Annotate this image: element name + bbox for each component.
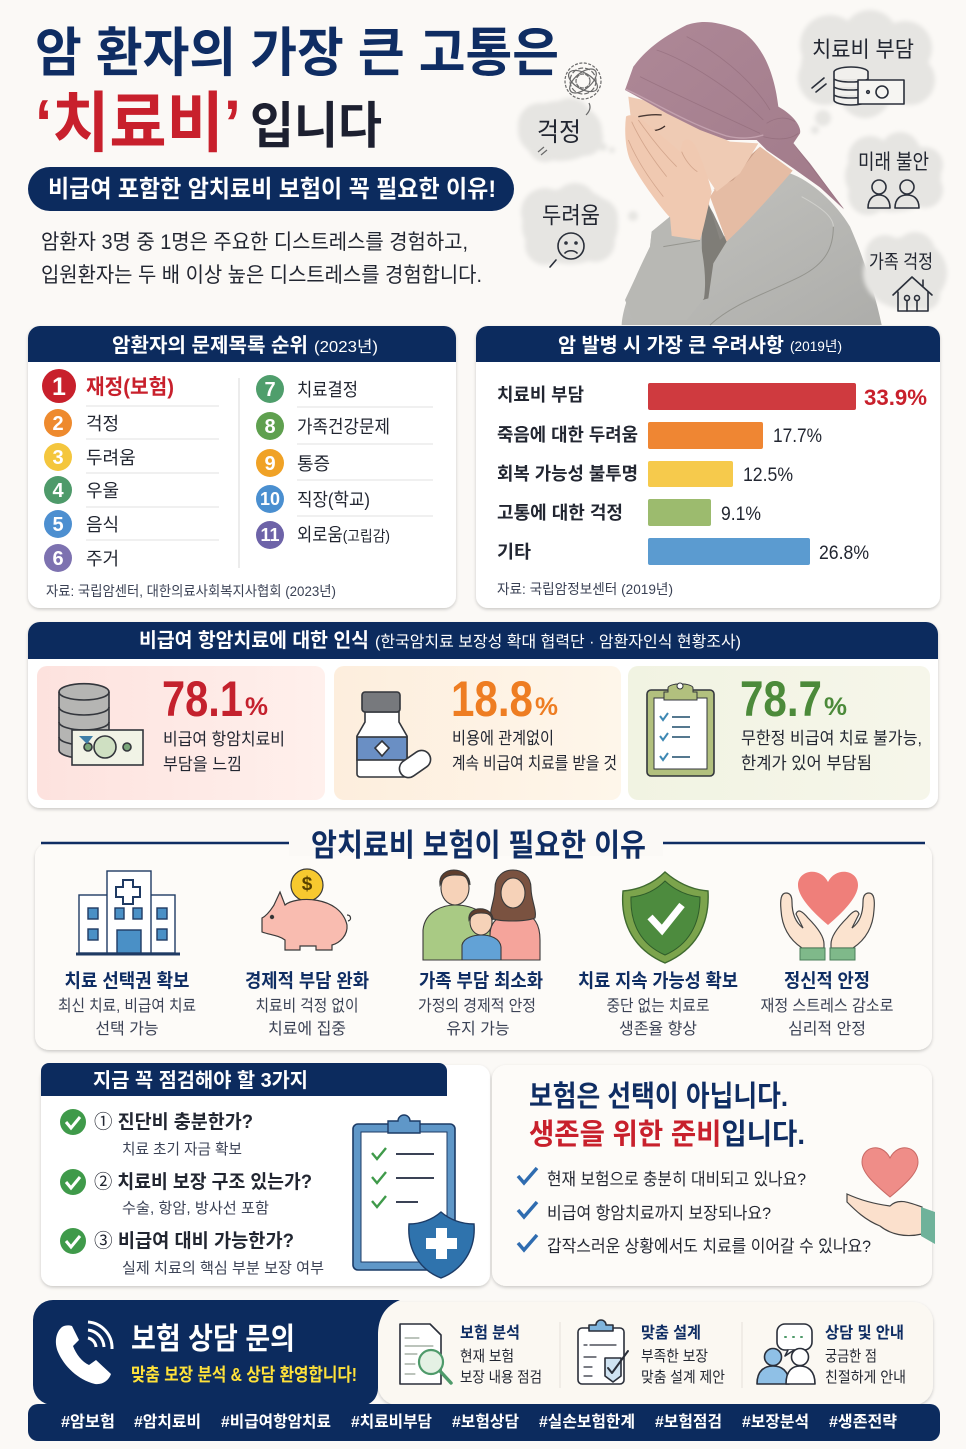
bar: recovery uncertainty — [497, 461, 793, 487]
reason: financial relief: 치료에 집중 — [268, 1020, 346, 1038]
heading: 생존을 위한 준비입니다. — [529, 1118, 805, 1151]
rank list right — [256, 375, 390, 549]
panel: biggest concerns bar chart — [476, 326, 940, 608]
rank list left — [42, 369, 174, 572]
reason: financial relief — [245, 869, 369, 1038]
intro text: 암환자 3명 중 1명은 주요한 디스트레스를 경험하고, — [41, 231, 468, 254]
reason: mental stability — [760, 872, 894, 1038]
reason: family burden: 유지 가능 — [446, 1020, 510, 1038]
icon: checklist clipboard — [647, 683, 714, 776]
bar: fear of death: 죽음에 대한 두려움 — [497, 425, 638, 445]
panel header: awareness: 비급여 항암치료에 대한 인식 — [139, 629, 369, 652]
illustration: woman covering face — [622, 22, 882, 325]
icon: coins and bill — [59, 684, 143, 765]
stat card: 78.1%: 부담을 느낌 — [163, 755, 242, 774]
stat card: 78.1%: 비급여 항암치료비 — [163, 730, 285, 749]
question 3: 갑작스러운 상황에서도 치료를 이어갈 수 있나요? — [547, 1237, 871, 1256]
card: consultation guidance — [757, 1324, 906, 1386]
stat card: 78.1%: 78.1 — [162, 671, 243, 727]
bar: recovery uncertainty: 회복 가능성 불투명 — [497, 464, 638, 484]
panel: consultation info cards — [378, 1302, 933, 1405]
reason: continued treatment: 중단 없는 치료로 — [606, 997, 710, 1015]
thought cloud: worry — [518, 63, 615, 162]
reason: treatment choice: 선택 가능 — [95, 1020, 159, 1038]
reason: continued treatment — [578, 872, 738, 1038]
stat card: 18.8%: 계속 비급여 치료를 받을 것 — [452, 754, 617, 773]
panel: why insurance is needed — [35, 826, 932, 1050]
bar: pain worry: 고통에 대한 걱정 — [497, 503, 623, 523]
panel: patient problem ranking — [28, 326, 456, 608]
panel header: checklist — [41, 1063, 447, 1096]
rank list left: 걱정 — [86, 414, 119, 434]
bar: recovery uncertainty: 12.5% — [743, 465, 793, 486]
rank list right: 9 — [264, 453, 276, 475]
panel: contact banner: 맞춤 보장 분석 & 상담 환영합니다! — [131, 1365, 357, 1385]
icon: phone with signal — [56, 1322, 112, 1384]
panel header: concerns: (2019년) — [790, 338, 842, 354]
check item 1: 치료 초기 자금 확보 — [122, 1141, 242, 1158]
rank list right: 치료결정 — [297, 380, 358, 400]
card: custom design: 부족한 보장 — [641, 1348, 708, 1365]
panel: awareness of non-covered treatment — [28, 622, 938, 808]
check item 2: ② 치료비 보장 구조 있는가? — [94, 1171, 312, 1193]
bar: cost burden: 치료비 부담 — [497, 385, 584, 405]
icon: heart in hands — [781, 872, 874, 960]
source note: 자료: 국립암센터, 대한의료사회복지사협회 (2023년) — [46, 583, 336, 599]
rank list left: 5 — [52, 514, 64, 536]
reason: continued treatment: 생존율 향상 — [619, 1020, 697, 1038]
heading: 보험은 선택이 아닙니다. — [529, 1080, 788, 1113]
bar: fear of death: 17.7% — [773, 426, 822, 447]
hashtag bar: #실손보험한계 — [539, 1413, 635, 1431]
heading — [529, 1080, 805, 1151]
bar: other — [497, 538, 869, 565]
thought cloud: worry: 걱정 — [537, 117, 581, 147]
panel header: awareness: (한국암치료 보장성 확대 협력단 · 암환자인식 현황조사) — [375, 633, 741, 651]
icon: clipboard with shield — [353, 1115, 474, 1278]
hashtag bar: #비급여항암치료 — [221, 1413, 331, 1431]
rank list left: 우울 — [86, 481, 119, 501]
card: insurance analysis — [400, 1324, 542, 1386]
reason: mental stability: 심리적 안정 — [788, 1020, 866, 1038]
rank list right: 가족건강문제 — [297, 417, 390, 437]
icon: piggy bank — [262, 869, 351, 950]
rank list left: 2 — [52, 413, 64, 435]
title: 입니다 — [250, 98, 382, 154]
bar: pain worry — [497, 499, 761, 526]
subtitle pill: 비급여 포함한 암치료비 보험이 꼭 필요한 이유! — [48, 176, 496, 203]
icon: scribble ball — [538, 63, 601, 155]
panel header: ranking — [28, 326, 456, 362]
panel: contact banner — [33, 1300, 400, 1405]
stat card: 78.1%: % — [245, 693, 268, 721]
hashtag bar: #보험상담 — [452, 1413, 519, 1431]
reason: financial relief: $ — [302, 874, 313, 895]
icon: sad face — [550, 233, 584, 267]
stat card: 78.7%: % — [824, 693, 847, 721]
reason: family burden: 가족 부담 최소화 — [419, 970, 543, 992]
stat card: 78.7%: 무한정 비급여 치료 불가능, — [741, 729, 922, 748]
hashtag bar: #암치료비 — [134, 1413, 201, 1431]
title — [35, 24, 559, 160]
reason: treatment choice: 치료 선택권 확보 — [64, 970, 190, 992]
check item 2: 수술, 항암, 방사선 포함 — [122, 1200, 269, 1217]
thought cloud: family worry: 가족 걱정 — [869, 251, 933, 273]
hashtag bar: #치료비부담 — [351, 1413, 432, 1431]
subtitle pill — [28, 167, 514, 211]
rank list right: 직장(학교) — [297, 490, 370, 510]
reason: financial relief: 치료비 걱정 없이 — [256, 997, 358, 1015]
card: custom design: 맞춤 설계 — [641, 1324, 701, 1342]
bar: cost burden: 33.9% — [864, 385, 927, 410]
panel: insurance is not a choice — [492, 1065, 935, 1286]
bar: pain worry: 9.1% — [721, 504, 761, 525]
bar: other: 26.8% — [819, 543, 869, 564]
panel header: checklist: 지금 꼭 점검해야 할 3가지 — [93, 1069, 308, 1092]
hashtag bar: #암보험 — [61, 1413, 115, 1431]
stat card: 18.8%: 비용에 관계없이 — [452, 729, 554, 748]
stat card: 18.8%: 18.8 — [451, 671, 533, 727]
bar: other: 기타 — [497, 542, 531, 562]
hashtag bar: #보험점검 — [655, 1413, 722, 1431]
rank list right: 8 — [264, 416, 276, 438]
reason: financial relief: 경제적 부담 완화 — [245, 970, 369, 992]
stat card: 78.7% — [628, 666, 930, 800]
hashtag bar — [28, 1404, 940, 1441]
stat card: 18.8% — [334, 666, 621, 800]
rank list left: 4 — [52, 480, 64, 502]
rank list left: 음식 — [86, 515, 119, 535]
reason: treatment choice: 최신 치료, 비급여 치료 — [58, 997, 196, 1015]
bar: fear of death — [497, 422, 822, 449]
icon: clipboard with pen — [578, 1320, 628, 1384]
title: 암 환자의 가장 큰 고통은 — [35, 24, 559, 83]
reason: mental stability: 재정 스트레스 감소로 — [760, 997, 894, 1015]
thought cloud: family worry — [863, 232, 947, 311]
panel header: ranking: (2023년) — [314, 338, 378, 356]
bar: cost burden — [497, 383, 927, 410]
reason: family burden: 가정의 경제적 안정 — [418, 997, 536, 1015]
rank list right: 외로움(고립감) — [297, 525, 390, 545]
card: insurance analysis: 현재 보험 — [460, 1348, 514, 1365]
check item 1: ① 진단비 충분한가? — [94, 1111, 253, 1133]
panel header: concerns: 암 발병 시 가장 큰 우려사항 — [558, 334, 784, 357]
question 2: 비급여 항암치료까지 보장되나요? — [547, 1204, 771, 1223]
check item 2 — [60, 1169, 312, 1217]
reason: treatment choice — [58, 871, 196, 1038]
reason: mental stability: 정신적 안정 — [784, 970, 870, 992]
intro text: 입원환자는 두 배 이상 높은 디스트레스를 경험합니다. — [41, 264, 482, 287]
panel header: awareness — [28, 622, 938, 659]
icon: two people — [868, 180, 919, 208]
check item 3: 실제 치료의 핵심 부분 보장 여부 — [122, 1260, 324, 1277]
icon: hospital — [76, 871, 180, 954]
rank list left: 1 — [52, 373, 66, 401]
icon: shield with check — [623, 872, 708, 963]
thought cloud: fear: 두려움 — [542, 202, 600, 228]
rank list left: 두려움 — [86, 448, 136, 468]
question 1: 현재 보험으로 충분히 대비되고 있나요? — [547, 1170, 806, 1189]
icon: coins and money — [812, 67, 904, 105]
check item 1 — [60, 1109, 253, 1158]
check item 3 — [60, 1228, 324, 1277]
rank list right: 11 — [260, 525, 280, 545]
title: ‘치료비’ — [35, 86, 241, 160]
intro text — [41, 231, 482, 287]
thought cloud: fear — [521, 183, 638, 267]
icon: medicine bottle and pill — [357, 692, 434, 781]
icon: document and magnifier — [400, 1324, 451, 1384]
rank list left: 6 — [52, 548, 64, 570]
icon: heart on open hand — [847, 1148, 935, 1244]
stat card: 78.7%: 한계가 있어 부담됨 — [741, 754, 872, 773]
card: custom design — [578, 1320, 725, 1386]
stat card: 78.7%: 78.7 — [740, 671, 822, 727]
panel: contact banner: 보험 상담 문의 — [131, 1323, 295, 1356]
reason: family burden — [418, 870, 543, 1038]
thought cloud: future anxiety — [845, 132, 943, 215]
icon: two people talking — [757, 1324, 815, 1384]
hashtag bar: #생존전략 — [829, 1413, 897, 1431]
panel header: ranking: 암환자의 문제목록 순위 — [112, 334, 308, 357]
thought cloud: treatment cost burden — [798, 10, 935, 134]
hashtag bar: #보장분석 — [742, 1413, 809, 1431]
stat card: 78.1% — [37, 666, 325, 800]
card: consultation guidance: 상담 및 안내 — [825, 1324, 904, 1342]
rank list left: 재정(보험) — [86, 376, 174, 399]
reason: continued treatment: 치료 지속 가능성 확보 — [578, 970, 738, 992]
card: consultation guidance: 친절하게 안내 — [825, 1369, 906, 1386]
card: consultation guidance: 궁금한 점 — [825, 1348, 877, 1365]
card: insurance analysis: 보장 내용 점검 — [460, 1369, 542, 1386]
source note: 자료: 국립암정보센터 (2019년) — [497, 581, 673, 597]
thought cloud: future anxiety: 미래 불안 — [858, 151, 929, 174]
stat card: 18.8%: % — [535, 693, 558, 721]
check item 3: ③ 비급여 대비 가능한가? — [94, 1230, 294, 1252]
rank list right: 7 — [264, 379, 276, 401]
panel header: concerns — [476, 326, 940, 362]
card: custom design: 맞춤 설계 제안 — [641, 1369, 725, 1386]
rank list right: 10 — [260, 489, 280, 509]
panel: three things to check — [41, 1063, 490, 1286]
rank list left: 주거 — [86, 549, 119, 569]
card: insurance analysis: 보험 분석 — [460, 1324, 520, 1342]
icon: house with family — [893, 277, 932, 311]
rank list left: 3 — [52, 447, 64, 469]
section heading: 암치료비 보험이 필요한 이유 — [311, 828, 646, 863]
thought cloud: treatment cost burden: 치료비 부담 — [812, 37, 914, 62]
icon: family — [423, 870, 540, 960]
rank list right: 통증 — [297, 454, 330, 474]
